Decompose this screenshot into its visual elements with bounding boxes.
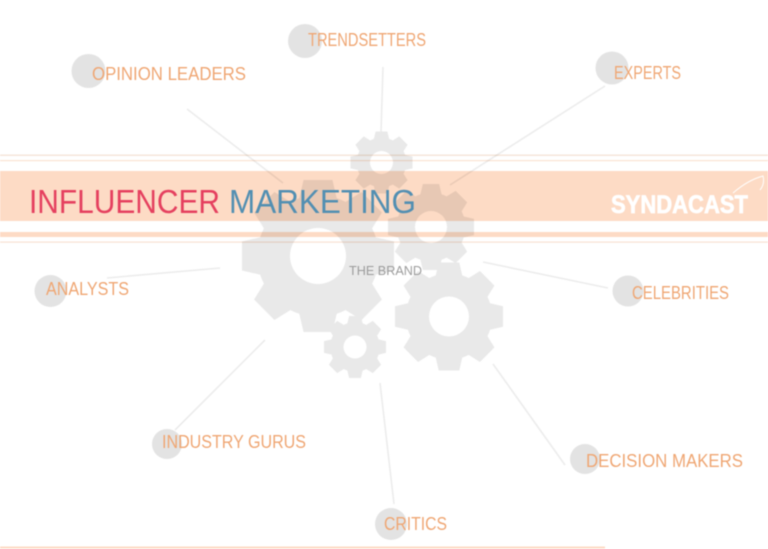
gear: bottom small [324, 316, 386, 378]
connector lines [107, 67, 608, 504]
node: critics [375, 508, 447, 540]
node: trendsetters: TRENDSETTERS [308, 30, 426, 50]
node: trendsetters [288, 24, 426, 58]
node: analysts: ANALYSTS [46, 279, 129, 299]
gear: large [242, 180, 394, 332]
title: INFLUENCER [29, 183, 220, 220]
node: critics: CRITICS [384, 514, 447, 534]
node: celebrities [612, 276, 729, 306]
title: MARKETING [229, 183, 416, 220]
node: decision makers [570, 444, 743, 474]
node: experts: EXPERTS [614, 63, 681, 83]
node: industry gurus [152, 429, 306, 459]
center label: the brand: THE BRAND [349, 264, 422, 278]
node: experts [596, 52, 681, 84]
gear: middle [388, 184, 474, 270]
gear: lower right [395, 262, 503, 370]
header band with stripes [0, 154, 768, 243]
node: celebrities: CELEBRITIES [632, 283, 729, 303]
logo: Syndacast: SYNDACAST [611, 191, 748, 219]
node: industry gurus: INDUSTRY GURUS [162, 432, 306, 452]
node: opinion leaders: OPINION LEADERS [92, 64, 246, 84]
node: analysts [34, 275, 129, 307]
node: opinion leaders [72, 54, 246, 88]
logo: Syndacast [611, 176, 764, 219]
gear: top small [350, 132, 412, 194]
gears cluster [242, 132, 503, 378]
node: decision makers: DECISION MAKERS [586, 451, 743, 471]
bottom rule [0, 546, 605, 548]
title [29, 183, 416, 220]
